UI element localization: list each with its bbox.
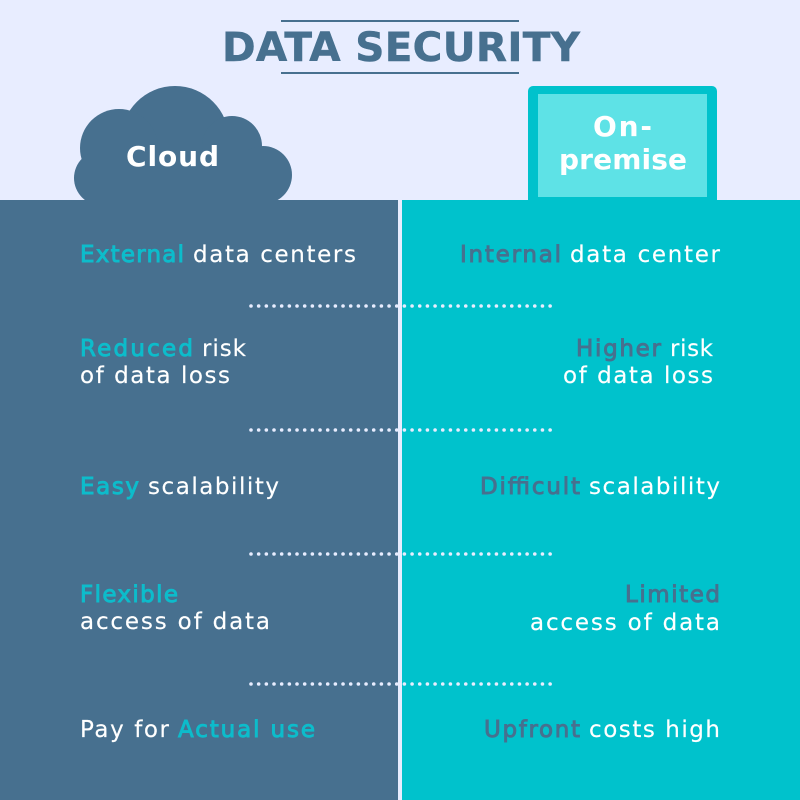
cloud row: data centers [80,242,356,268]
cloud row: risk: Reduced [80,336,193,362]
on-premise row: data center [460,242,721,268]
icon: on-premise monitor: premise [559,143,687,176]
on-premise row: scalability: Difficult [480,474,580,500]
icon: cloud: Cloud [126,140,219,173]
on-premise row: scalability: scalability [589,474,720,500]
on-premise row: data center: data center [570,242,721,268]
cloud row: scalability [80,474,279,500]
cloud row: access: Flexible [80,582,178,608]
icon: cloud [74,86,292,206]
on-premise row: access: access of data [530,610,720,636]
on-premise row: risk [563,336,714,389]
icon: on-premise monitor: On- [593,110,652,143]
panel: on-premise [402,200,800,800]
cloud row: risk: risk [202,336,247,362]
cloud row: scalability: scalability [148,474,279,500]
icon: on-premise monitor [528,86,717,200]
cloud row: access [80,582,270,635]
panel: cloud [0,200,398,800]
on-premise row: risk: of data loss [563,363,713,389]
on-premise row: cost [484,717,720,743]
on-premise row: scalability [480,474,720,500]
on-premise row: risk: risk [670,336,714,362]
cloud row: cost [80,717,315,743]
cloud row: cost: Pay for [80,717,170,743]
cloud row: cost: Actual use [178,717,315,743]
cloud row: access: access of data [80,609,270,635]
on-premise row: cost: costs high [589,717,720,743]
cloud row: risk: of data loss [80,363,230,389]
on-premise row: cost: Upfront [484,717,580,743]
cloud row: data centers: data centers [193,242,356,268]
cloud row: data centers: External [80,242,184,268]
on-premise row: data center: Internal [460,242,561,268]
cloud row: scalability: Easy [80,474,139,500]
cloud row: risk [80,336,247,389]
on-premise row: access [530,582,720,636]
title: DATA SECURITY [222,23,581,71]
on-premise row: access: Limited [625,582,720,608]
on-premise row: risk: Higher [576,336,662,362]
